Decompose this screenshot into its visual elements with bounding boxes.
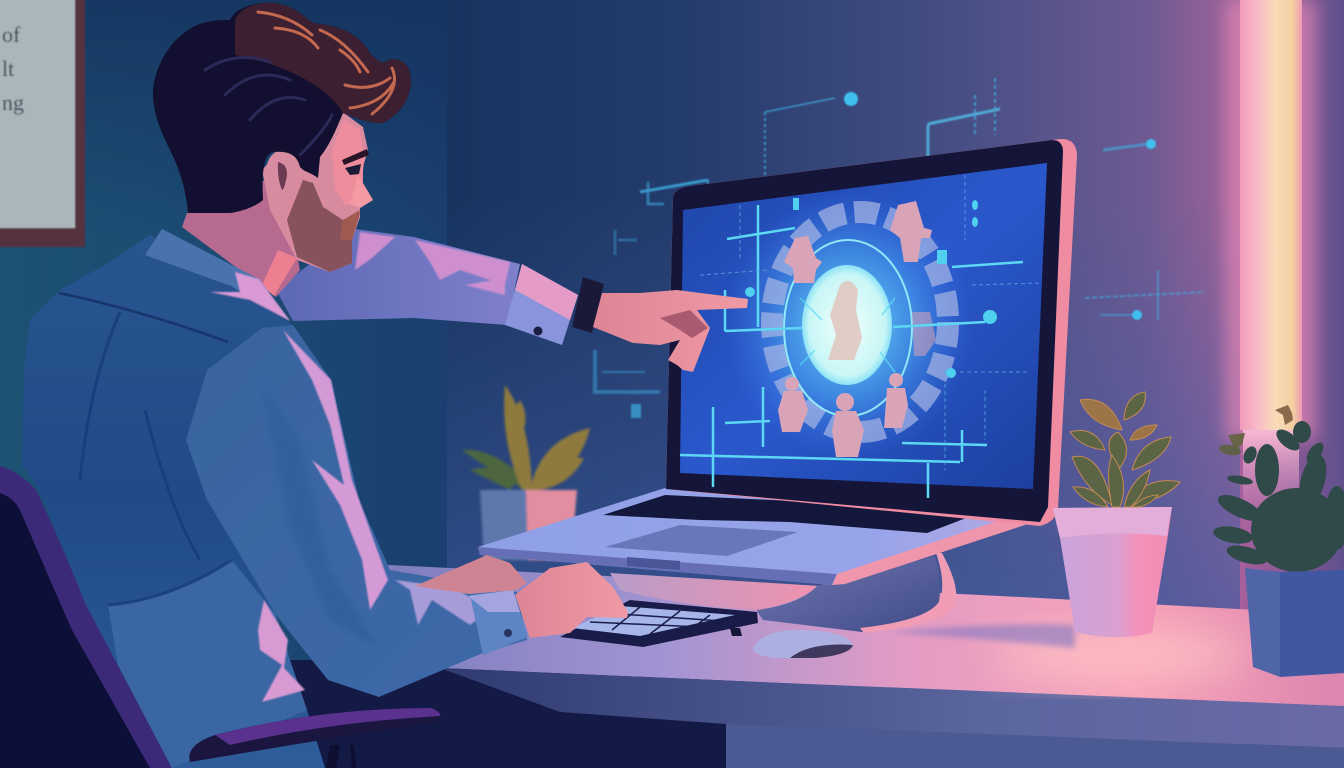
screen nodes	[745, 198, 997, 378]
laptop notch	[627, 557, 680, 570]
nose	[350, 175, 373, 208]
chair arm	[189, 708, 440, 768]
chair	[0, 466, 172, 768]
cuff button	[504, 629, 512, 637]
keyboard	[603, 495, 987, 533]
background: left wall	[0, 0, 448, 768]
framed picture: ng	[2, 90, 24, 115]
screen figures	[778, 201, 936, 457]
desk	[300, 562, 1344, 768]
hologram nodes	[631, 92, 1156, 418]
watch	[572, 277, 604, 333]
plant leaves	[1212, 405, 1344, 572]
neck	[182, 180, 300, 297]
moustache	[340, 210, 360, 240]
screen housing	[666, 139, 1077, 526]
forearm highlight	[395, 580, 490, 625]
cuff button	[534, 326, 542, 336]
plant pot	[1053, 507, 1172, 637]
shirt lower highlight	[258, 600, 305, 702]
square pot	[1245, 568, 1280, 677]
pointing arm	[276, 229, 520, 325]
yoke seam	[59, 293, 228, 342]
ear inner	[278, 162, 287, 190]
pointing hand	[593, 290, 748, 372]
inner ring	[784, 240, 912, 416]
plant pot rim	[1053, 507, 1172, 538]
shirt cuff	[505, 264, 578, 345]
central keyhole figure	[828, 281, 862, 360]
mouse	[753, 630, 853, 658]
eyebrow	[342, 149, 369, 165]
background: right wall	[447, 0, 1242, 768]
collar	[145, 229, 290, 321]
background: glowing light strip	[1225, 0, 1344, 640]
framed picture: of	[2, 22, 21, 47]
under desk shadow	[290, 660, 726, 768]
left arm	[186, 325, 527, 697]
hair crown	[235, 3, 411, 123]
shirt lower panel	[108, 560, 307, 768]
screen dotted lines	[700, 175, 1042, 470]
collar highlight	[210, 272, 290, 321]
face highlight	[332, 120, 364, 205]
cuff highlight	[515, 264, 578, 320]
trackpad	[605, 525, 798, 556]
right plant	[1053, 392, 1180, 637]
laptop stand	[610, 553, 956, 633]
shirt back	[22, 235, 325, 768]
plant leaves	[1070, 392, 1180, 507]
neck highlight	[262, 250, 297, 296]
framed picture	[0, 0, 85, 247]
hair	[153, 3, 411, 213]
arm shade	[260, 380, 380, 650]
laptop base	[478, 488, 1040, 585]
back crease	[80, 312, 232, 605]
framed picture: lt	[2, 56, 14, 81]
back plant	[462, 385, 590, 560]
hand shadow	[660, 310, 708, 338]
screen circuit lines	[680, 205, 1023, 498]
beard	[287, 180, 360, 272]
far right plant	[1212, 405, 1344, 677]
face	[262, 113, 373, 272]
hair copper strands	[258, 12, 394, 114]
arm highlight	[283, 330, 388, 610]
screen	[680, 163, 1047, 489]
laptop	[478, 139, 1077, 585]
hand behind	[415, 555, 527, 594]
hologram: lines around the screen	[595, 78, 1205, 392]
eye	[345, 164, 361, 175]
external keyboard	[560, 600, 758, 647]
segmented ring	[772, 212, 948, 432]
hair dark strands	[205, 58, 332, 155]
typing hand	[515, 562, 628, 638]
sleeve cuff	[470, 590, 528, 655]
man	[22, 3, 748, 768]
screen glow	[723, 190, 973, 460]
core disc	[802, 265, 892, 385]
ear	[265, 151, 295, 203]
forearm cuff top	[468, 590, 520, 612]
